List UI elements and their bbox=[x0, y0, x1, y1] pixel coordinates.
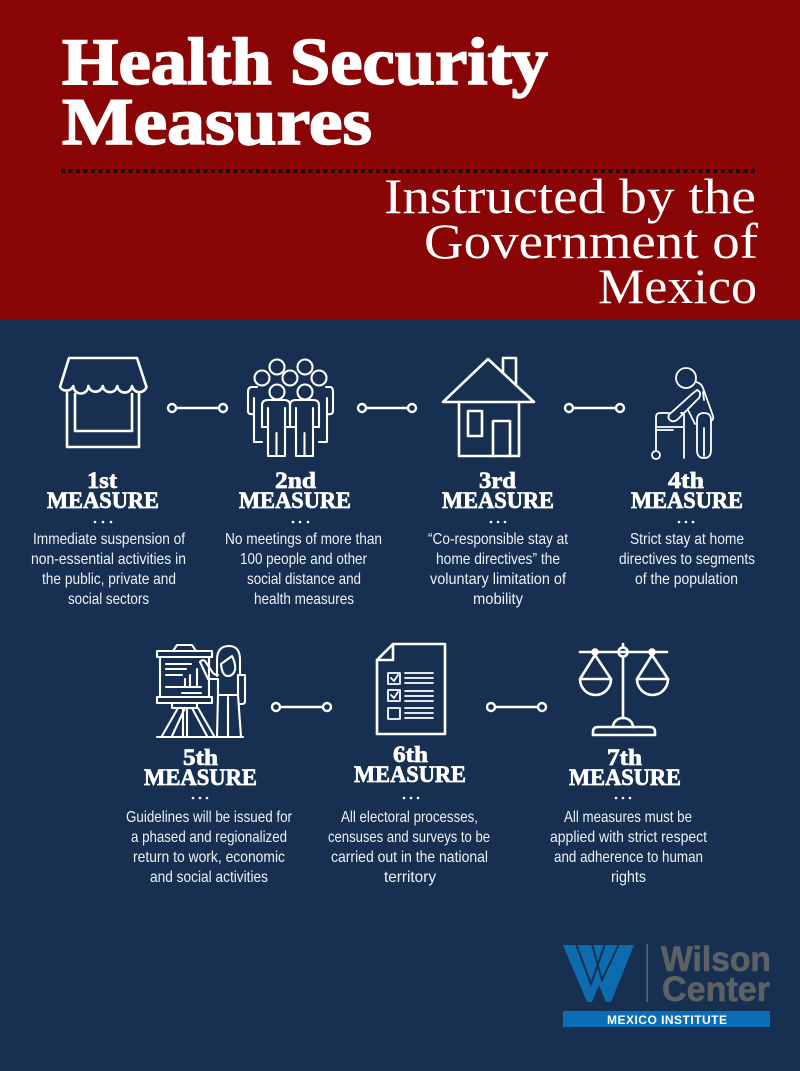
measure 7: applied with strict respect bbox=[550, 829, 707, 846]
icon: group of people bbox=[248, 360, 333, 456]
logo: Wilson Center Mexico Institute: Center bbox=[662, 970, 770, 1009]
measure 1: the public, private and bbox=[42, 571, 176, 588]
measure 2 bbox=[225, 468, 382, 608]
measure 3: 3rd bbox=[479, 468, 516, 493]
measure 5: 5th bbox=[183, 745, 218, 770]
measure 1: social sectors bbox=[68, 591, 149, 608]
measure 3: “Co-responsible stay at bbox=[428, 531, 568, 548]
measure 4: 4th bbox=[668, 468, 704, 493]
measure 4 bbox=[619, 468, 755, 588]
connector 1 bbox=[168, 404, 227, 412]
measure 1: non-essential activities in bbox=[31, 551, 186, 568]
measure 6: censuses and surveys to be bbox=[328, 829, 490, 846]
measure 5: return to work, economic bbox=[133, 849, 285, 866]
measure 6 bbox=[328, 742, 490, 886]
logo: Wilson Center Mexico Institute bbox=[563, 940, 771, 1027]
subtitle: Mexico bbox=[598, 258, 757, 314]
measure 3 bbox=[428, 468, 568, 608]
measure 4: directives to segments bbox=[619, 551, 755, 568]
measure 4: Strict stay at home bbox=[630, 531, 744, 548]
logo: Wilson Center Mexico Institute: Wilson bbox=[661, 940, 771, 979]
measure 5 bbox=[126, 745, 293, 886]
subtitle bbox=[384, 168, 758, 314]
measure 6: All electoral processes, bbox=[341, 809, 478, 826]
connector 5 bbox=[487, 703, 546, 711]
connector 3 bbox=[565, 404, 624, 412]
measure 5: a phased and regionalized bbox=[131, 829, 287, 846]
measure 4: of the population bbox=[635, 571, 738, 588]
measure 7: MEASURE bbox=[569, 765, 681, 790]
icon: person with walker bbox=[652, 368, 713, 459]
measure 5: and social activities bbox=[150, 869, 268, 886]
measure 7 bbox=[550, 745, 707, 886]
measure 2: No meetings of more than bbox=[225, 531, 382, 548]
subtitle: Instructed by the bbox=[384, 168, 756, 224]
title: Health Security bbox=[62, 25, 548, 99]
measure 1: MEASURE bbox=[47, 488, 159, 513]
measure 2: health measures bbox=[254, 591, 354, 608]
header panel bbox=[0, 0, 800, 320]
connector 2 bbox=[358, 404, 416, 412]
measure 2: 100 people and other bbox=[240, 551, 368, 568]
measure 5: MEASURE bbox=[144, 765, 257, 790]
measure 6: 6th bbox=[393, 742, 428, 767]
icon: storefront bbox=[60, 358, 146, 447]
measure 7: and adherence to human bbox=[554, 849, 703, 866]
subtitle: Government of bbox=[424, 213, 758, 269]
measure 3: mobility bbox=[473, 591, 523, 608]
measure 1: 1st bbox=[87, 468, 117, 493]
icon: checklist document bbox=[377, 644, 445, 734]
title: Measures bbox=[62, 85, 372, 159]
measure 7: 7th bbox=[607, 745, 642, 770]
measure 1: Immediate suspension of bbox=[33, 531, 185, 548]
measure 2: social distance and bbox=[247, 571, 361, 588]
measure 7: rights bbox=[611, 869, 646, 886]
icon: presenter at easel bbox=[157, 645, 245, 737]
connector 4 bbox=[272, 703, 331, 711]
icon: scales of justice bbox=[580, 644, 668, 735]
measure 2: 2nd bbox=[275, 468, 316, 493]
measure 6: MEASURE bbox=[354, 762, 466, 787]
measure 1 bbox=[31, 468, 186, 608]
measure 4: MEASURE bbox=[631, 488, 743, 513]
measure 6: carried out in the national bbox=[331, 849, 488, 866]
title bbox=[62, 25, 548, 159]
logo mark bbox=[563, 944, 634, 1002]
logo: Wilson Center Mexico Institute: MEXICO INSTITUTE bbox=[607, 1013, 727, 1027]
measure 3: home directives” the bbox=[436, 551, 560, 568]
measure 3: voluntary limitation of bbox=[430, 571, 566, 588]
measure 5: Guidelines will be issued for bbox=[126, 809, 293, 826]
measure 2: MEASURE bbox=[239, 488, 351, 513]
icon: house bbox=[443, 358, 534, 456]
measure 7: All measures must be bbox=[564, 809, 692, 826]
measure 6: territory bbox=[384, 869, 436, 886]
measure 3: MEASURE bbox=[442, 488, 554, 513]
